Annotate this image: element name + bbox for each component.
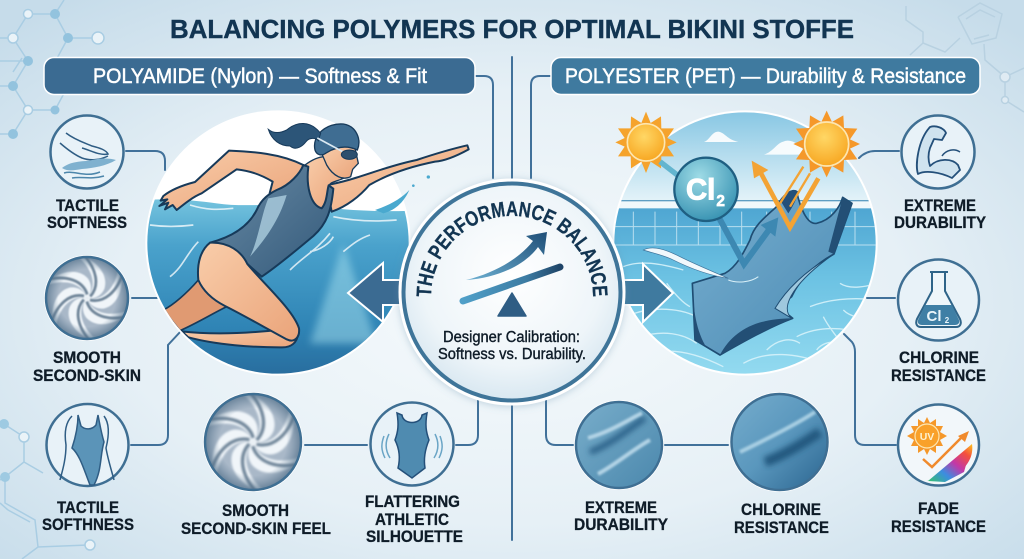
feature: chlorine resistance, fabric swatch: CHLORINE [741,500,821,519]
header: polyamide [44,58,475,94]
feature: tactile softhness, suit on body icon: SOFTHNESS [42,515,134,534]
water [147,199,409,374]
title: BALANCING POLYMERS FOR OPTIMAL BIKINI STOFFE [170,14,854,44]
feature: smooth second-skin, silk swatch: SECOND-SKIN [33,366,141,385]
swimmer: rear leg [163,280,298,347]
icon: balance beam [463,267,560,301]
panel: performance balance hub [395,176,629,410]
curved heading: THE PERFORMANCE BALANCE [416,201,608,296]
decorative molecule: bottom left [0,419,95,559]
feature: fade resistance, UV icon: UV [920,431,934,443]
swimmer: swimsuit [210,165,333,277]
feature: flattering athletic silhouette, suit icon: SILHOUETTE [366,527,463,546]
feature: chlorine resistance, fabric swatch [730,392,830,537]
feature: smooth second-skin feel, silk swatch [181,389,331,538]
swimmer: neck [305,157,343,208]
feature: tactile softness, hand icon: SOFTNESS [47,213,127,232]
feature: extreme durability, muscle icon [894,116,987,232]
feature: smooth second-skin, silk swatch [33,253,141,385]
panel: pool and suit illustration [610,110,880,382]
swimmer: goggles [317,138,357,159]
feature: tactile softness, hand icon: TACTILE [56,196,119,215]
icon: chlorine bubble [660,158,738,221]
decorative molecule: top right [906,3,1024,112]
arrow: left pointing [348,263,402,322]
feature: smooth second-skin, silk swatch: SMOOTH [53,348,121,367]
swimmer: ponytail [268,124,321,148]
feature: smooth second-skin feel, silk swatch: SMOOTH [222,501,289,520]
water splash [375,175,430,213]
hub caption: Softness vs. Durability. [438,346,586,363]
feature: flattering athletic silhouette, suit icon: FLATTERING [365,492,460,511]
feature: chlorine resistance, fabric swatch: RESISTANCE [734,518,829,537]
suit [643,190,852,355]
feature: fade resistance, UV icon: RESISTANCE [891,517,986,536]
feature: chlorine resistance, flask icon: 2 [945,316,950,325]
arrow: UV deflection [752,161,818,227]
icon: left sun [615,112,677,173]
feature: tactile softhness, suit on body icon [42,404,134,534]
icon: rising arrow [466,232,547,280]
hub caption [438,329,586,363]
feature: extreme durability, fabric swatch: EXTREME [585,498,657,517]
header: polyester [551,58,980,94]
feature: extreme durability, fabric swatch: DURABILITY [574,515,669,534]
icon: chlorine bubble: Cl [686,173,715,206]
feature: chlorine resistance, flask icon: Cl [926,308,942,325]
feature: extreme durability, muscle icon: EXTREME [904,196,976,215]
clouds [704,132,807,155]
icon: chlorine bubble: 2 [716,193,725,210]
feature: chlorine resistance, flask icon: CHLORINE [899,348,979,367]
connector lines [126,57,899,540]
feature: flattering athletic silhouette, suit icon: ATHLETIC [375,510,449,529]
feature: tactile softhness, suit on body icon: TACTILE [57,498,119,517]
feature: fade resistance, UV icon: FADE [918,499,959,518]
swimmer: back arm [159,151,303,210]
panel: swimmer illustration [130,110,469,383]
feature: extreme durability, muscle icon: DURABILITY [894,213,987,232]
feature: chlorine resistance, flask icon: RESISTANCE [891,366,986,385]
icon: fulcrum [498,293,526,316]
icon: right sun [793,111,860,177]
arrow: chlorine deflection [719,218,770,264]
feature: smooth second-skin feel, silk swatch: SECOND-SKIN FEEL [181,519,331,538]
arrow: right pointing [622,264,673,322]
feature: flattering athletic silhouette, suit icon [365,402,463,546]
feature: chlorine resistance, flask icon [891,260,986,385]
swimmer: front leg [198,243,299,341]
swimmer: front arm [327,145,469,212]
hub caption: Designer Calibration: [443,329,580,346]
header: polyester: POLYESTER (PET) — Durability & Resistance [565,65,966,88]
decorative molecule: top left [0,0,104,139]
feature: extreme durability, fabric swatch [574,400,669,534]
feature: tactile softness, hand icon [47,116,127,232]
swimmer: head [322,145,358,178]
header: polyamide: POLYAMIDE (Nylon) — Softness & Fit [93,65,427,88]
feature: fade resistance, UV icon [891,404,986,536]
